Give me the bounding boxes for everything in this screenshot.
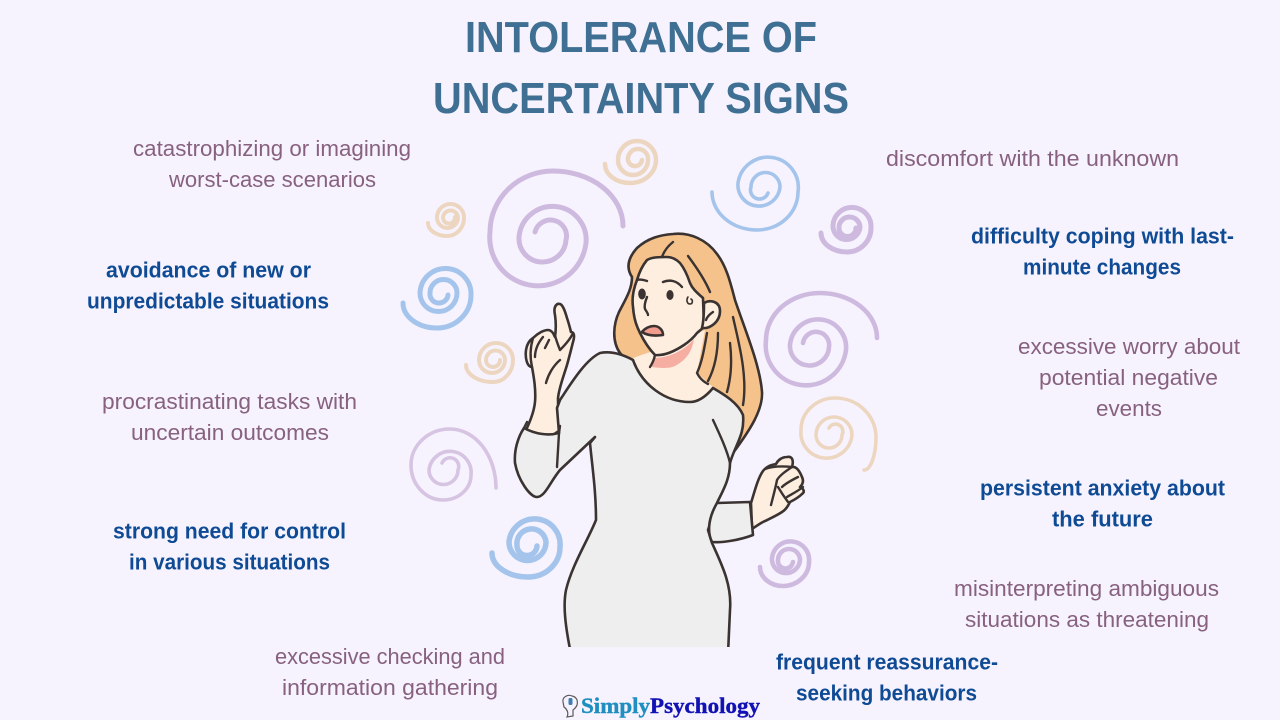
hair parting [662, 242, 673, 257]
sign: catastrophizing [133, 136, 411, 192]
icon: purple spiral bottom right [760, 541, 809, 586]
icon: tan spiral right [801, 398, 876, 470]
title: UNCERTAINTY SIGNS [433, 74, 849, 123]
sign: catastrophizing: catastrophizing or imagining [133, 136, 411, 161]
hair line 2 [727, 343, 731, 392]
sign: procrastinating: procrastinating tasks with [102, 389, 357, 414]
sign: avoidance: avoidance of new or [106, 258, 311, 282]
palm crease [546, 360, 560, 383]
sign: excessive checking: excessive checking and [275, 644, 505, 669]
mouth [642, 326, 663, 336]
sign: need for control: strong need for control [113, 518, 346, 544]
hair line 3 [733, 317, 744, 405]
sign: discomfort: discomfort with the unknown [886, 146, 1179, 171]
face [633, 257, 704, 355]
icon: blue spiral lower [492, 519, 560, 577]
sign: excessive worry: excessive worry about [1018, 334, 1240, 359]
logo icon: head [563, 695, 577, 717]
icon: tan spiral middle left [466, 343, 513, 382]
sweat drop [687, 297, 692, 304]
sign: persistent anxiety: the future [1052, 506, 1153, 532]
sign: misinterpreting [954, 576, 1219, 632]
sign: persistent anxiety: persistent anxiety about [980, 476, 1226, 500]
pointing finger line [555, 333, 573, 350]
sign: last-minute changes [971, 224, 1234, 280]
sign: last-minute changes: minute changes [1023, 254, 1181, 280]
ear [702, 301, 720, 328]
torso crease [713, 420, 730, 463]
sign: need for control: in various situations [129, 550, 330, 574]
hair strand [688, 256, 710, 292]
shirt [515, 352, 743, 654]
hair [614, 234, 762, 453]
neck [633, 330, 714, 410]
icon: small tan spiral [428, 204, 464, 236]
icon: purple spiral lower left [411, 429, 496, 500]
ear detail [706, 312, 713, 320]
right eye [666, 290, 674, 300]
sign: catastrophizing: worst-case scenarios [168, 167, 376, 192]
sign: avoidance: unpredictable situations [87, 288, 329, 314]
sign: procrastinating [102, 389, 357, 445]
title [433, 13, 849, 123]
icon: small purple spiral top right [821, 207, 871, 252]
sign: excessive worry: events [1096, 396, 1162, 421]
icon: large purple spiral right [766, 293, 877, 385]
chin to neck [650, 355, 655, 367]
curled fingers [531, 337, 549, 367]
sign: excessive checking [275, 644, 505, 700]
illustration: worried woman [515, 234, 804, 657]
sign: excessive worry [1018, 334, 1240, 421]
logo icon: brain mark [568, 698, 572, 705]
left cuff [524, 422, 560, 433]
sign: misinterpreting: situations as threatening [965, 607, 1209, 632]
left hand [525, 304, 574, 442]
right brow [663, 281, 682, 287]
hair line 1 [708, 333, 718, 381]
left brow [637, 280, 647, 281]
neck shadow [652, 339, 694, 368]
sign: need for control [113, 518, 346, 574]
sign: misinterpreting: misinterpreting ambiguous [954, 576, 1219, 601]
sign: reassurance-seeking: seeking behaviors [796, 680, 977, 706]
sign: persistent anxiety [980, 476, 1226, 532]
sign: reassurance-seeking [776, 650, 998, 706]
icon: tan spiral top [605, 141, 656, 183]
thumb and fingers [765, 466, 803, 505]
sign: avoidance [87, 258, 329, 314]
icon: large purple spiral top [490, 171, 623, 286]
right sleeve [709, 502, 753, 542]
sleeve seam [557, 433, 559, 467]
icon: blue spiral top right [712, 157, 798, 230]
right hand [751, 457, 804, 529]
left eye [638, 288, 646, 300]
sign: procrastinating: uncertain outcomes [131, 420, 329, 445]
logo wordmark: SimplyPsychology [581, 693, 760, 718]
sign: excessive checking: information gathering [282, 675, 498, 700]
nose [645, 297, 648, 315]
logo: Simply Psychology [563, 693, 760, 718]
icon: blue spiral left [403, 268, 471, 328]
neck and hair lines [697, 333, 708, 384]
sign: reassurance-seeking: frequent reassurance- [776, 650, 998, 674]
sign: last-minute changes: difficulty coping with last- [971, 224, 1234, 248]
shirt bottom edge cover [560, 647, 735, 657]
title: INTOLERANCE OF [465, 13, 817, 62]
sign: excessive worry: potential negative [1039, 365, 1218, 390]
